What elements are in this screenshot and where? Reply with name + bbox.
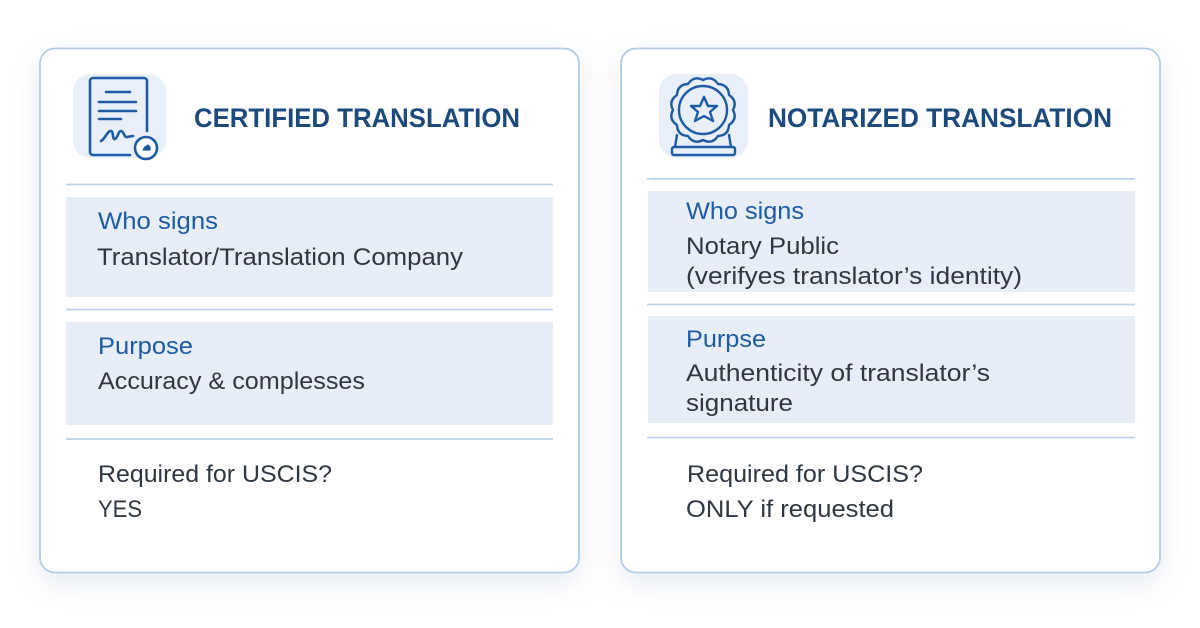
row: who signs: (verifyes translator’s identity) (686, 263, 1022, 290)
heading: certified translation: CERTIFIED TRANSLATION (194, 103, 520, 133)
row: who signs: Who signs (98, 208, 218, 235)
row: required for USCIS (686, 461, 923, 523)
icon: notary seal (659, 74, 748, 158)
row: required for USCIS: Required for USCIS? (98, 461, 332, 488)
row: who signs: Translator/Translation Company (97, 244, 464, 271)
row: purpose (648, 316, 1135, 423)
panel: notarized translation (621, 48, 1160, 572)
row: purpose: Purpse (686, 326, 766, 353)
row: required for USCIS: YES (98, 496, 142, 523)
row: who signs: Who signs (686, 198, 804, 225)
row: purpose (66, 322, 553, 425)
icon: certified document (73, 74, 166, 159)
panel: certified translation (40, 48, 579, 572)
row: who signs (66, 197, 553, 297)
row: purpose: Accuracy & complesses (98, 368, 365, 395)
row: purpose: Authenticity of translator’s (686, 360, 990, 387)
row: who signs: Notary Public (686, 233, 839, 260)
row: who signs (648, 191, 1135, 292)
row: required for USCIS: Required for USCIS? (687, 461, 923, 488)
row: required for USCIS: ONLY if requested (686, 496, 894, 523)
row: purpose: Purpose (98, 333, 193, 360)
row: required for USCIS (98, 461, 332, 523)
row: purpose: signature (686, 390, 793, 417)
heading: notarized translation: NOTARIZED TRANSLATION (768, 103, 1112, 133)
